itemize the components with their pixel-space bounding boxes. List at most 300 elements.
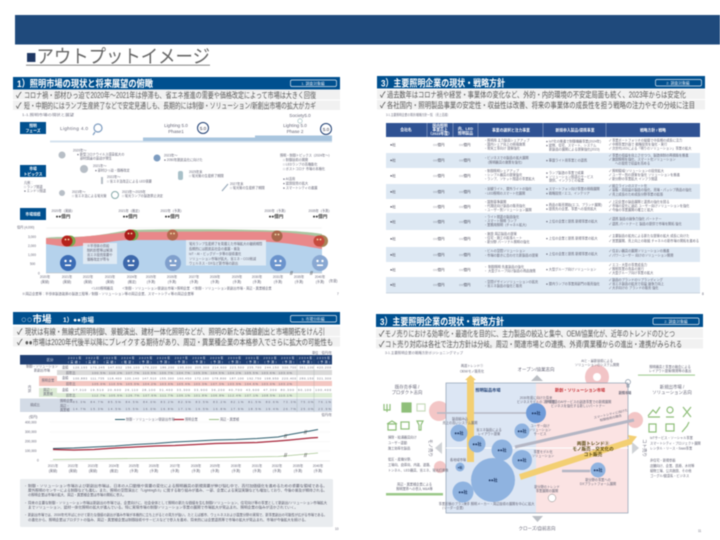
- map annotations: ソリューション: [529, 428, 551, 432]
- market topics: ● エンドリ関連: [24, 188, 47, 193]
- line chart: //: [284, 453, 288, 459]
- left column: product-oriented: 周辺・異業種企業による: [397, 482, 432, 486]
- note box: [20, 479, 333, 527]
- panel: market table and line chart: 単位：億円/年: [312, 350, 333, 355]
- table rows: ● 上位の企業と提携 新規事業の拡大: [546, 218, 598, 224]
- left column: product-oriented: ユーザー連動: [388, 440, 407, 445]
- market table labels: [26, 364, 76, 412]
- line chart axis labels: (予測): [232, 468, 240, 473]
- line chart axis labels: (予測): [253, 468, 261, 473]
- map annotations: （リーダー企業）: [440, 505, 466, 510]
- table rows: ・ビルの空間ソリューション: [484, 248, 525, 253]
- table rows: ・空間デザインソリューションの拡充: [484, 279, 539, 284]
- note box: 将来の主要な制御・ソリューション市場は新創出の市場では、企業向けに、社会全体として照明の新たな価値を生む制御/ソリューション、住宅向け等の事業として新創出/ソリューション市場拡大: [28, 500, 328, 505]
- market table header: 2021年 2022年 2023年 2024年 2025年 2026年 2027年 2028年 2029年 2030年 2031年 2032年 2033年 2034年 2035年: [68, 355, 330, 360]
- line chart legend: 照明企業: [185, 416, 199, 422]
- chart axis labels: 2027年: [189, 274, 200, 279]
- market topics: □ 省エネ法改正による LED需要: [107, 178, 153, 184]
- chart axis labels: (予測): [233, 279, 241, 284]
- market table labels: 異業種: [60, 407, 70, 412]
- map quadrants: 照明製品市場: [475, 386, 501, 394]
- table rows: ✓ 上記企業の製品展開と連携の強化を図る: [609, 199, 669, 204]
- map annotations: 再週トレンド①: [461, 363, 484, 368]
- map annotations: モノ販売→交叉化の: [572, 446, 614, 452]
- callout notes on chart: 長期的には脱炭素社会の進展・普及: [189, 246, 241, 251]
- chart axis labels: 2022年: [83, 274, 94, 279]
- chart axis labels: 2040年: [315, 274, 326, 279]
- market table labels: 照明企業: [60, 398, 74, 403]
- market topics: □ 蛍光管の生産終了期限: [189, 173, 224, 178]
- table rows: ● 大型グループ向けソリューション: [546, 266, 596, 272]
- market topics: □ 制御技術の開発: [283, 157, 309, 162]
- callout notes on chart: 蛍光ランプ生産終了を見据えた市場拡大の継続期間: [189, 241, 262, 246]
- chart axis labels: (実績): [63, 279, 71, 284]
- phase timeline: Lighting 5.0: [283, 123, 307, 128]
- company bubbles: ●●社: [531, 410, 541, 416]
- map annotations: レイアウト提案/開発等の進出: [649, 368, 691, 373]
- table rows: ・ 制御照明 先進製品の強化: [484, 264, 525, 269]
- table rows: ● 提携先の企業、事業への投資拡大: [546, 206, 597, 211]
- panel 1 key messages: ✓: [16, 102, 22, 110]
- right column: solution-oriented: 店舗向け、企業、医療、木材等: [650, 463, 695, 468]
- market size callouts: 2021年（推定）: [118, 208, 142, 213]
- chart axis labels: (予測): [253, 279, 261, 284]
- table header: 内、LED: [458, 126, 473, 131]
- market topics: □ 蛍光ランプの製造禁止決定: [122, 193, 164, 198]
- right column: solution-oriented: スマートシティ・プロジェクト展開: [650, 440, 701, 446]
- market topics: [20, 148, 332, 198]
- chart axis labels: 2035年: [294, 274, 305, 279]
- map annotations: 売上の高いシステム展開: [443, 420, 477, 425]
- table header: 戦略方針 / 戦略: [640, 128, 666, 132]
- line chart axis labels: 2021年: [48, 463, 59, 468]
- table rows: ✓ 住まい器具の展開ソリューションの推進: [609, 248, 670, 253]
- table rows: ・電気工事向け 提案強化: [484, 146, 521, 150]
- table rows: ・国内シェア向上の積極施策: [484, 142, 526, 146]
- table rows: ●社: [390, 252, 396, 257]
- panel 2 key messages: [377, 90, 705, 110]
- table rows: ●社: [390, 219, 396, 224]
- market table labels: 前年比: [66, 370, 76, 375]
- table rows: ○○億円: [459, 158, 471, 162]
- market size area chart: 3,000: [28, 235, 36, 239]
- line chart: [25, 414, 330, 473]
- table rows: ● 上位の企業と提携 新規事業の拡大: [546, 236, 598, 240]
- line chart axis labels: (予測): [211, 468, 219, 473]
- left column: product-oriented: [384, 384, 449, 496]
- table rows: ✓ エコ・大型の事業成長力: [609, 262, 647, 267]
- panel: major company status table: [377, 76, 705, 296]
- market size callouts: 2022年（予測）: [160, 208, 184, 213]
- table rows: ● 屋内ランプの事業用部門の販売強化: [546, 281, 601, 286]
- table rows: ○○億円: [459, 282, 471, 287]
- phase timeline: Phase1: [168, 129, 184, 134]
- market table labels: 照明企業: [42, 378, 55, 382]
- map quadrants: [429, 365, 643, 513]
- line chart axis labels: 2024年: [109, 463, 120, 468]
- market size callouts: 2020年（実績）: [51, 208, 75, 213]
- table rows: ●社: [390, 189, 396, 194]
- market topics: □ LEDランプの高機能化: [283, 162, 318, 166]
- chart axis labels: (年度): [329, 278, 338, 283]
- chart axis labels: (実績): [41, 279, 49, 284]
- line chart: 300,000: [25, 430, 37, 434]
- line chart axis labels: 2026年: [149, 463, 160, 468]
- chart axis labels: 2020年: [40, 274, 51, 279]
- table rows: ●社: [390, 173, 396, 178]
- table rows: ○○億円: [433, 267, 445, 272]
- line chart axis labels: (予測): [294, 468, 302, 473]
- table rows: ●社: [390, 236, 396, 241]
- table rows: ● スマートフォン向け事業の積極展開: [546, 186, 600, 191]
- panel 1 key messages: 短・中期的にはランプ生産終了などで安定見通しも、長期的には制御・ソリューション/新創出市場の拡大がカギ: [24, 100, 316, 110]
- market size callouts: ●●億円: [56, 213, 71, 220]
- right column: solution-oriented: 新規出市場 /: [660, 384, 685, 390]
- panel 4 heading: 2. 調査対象編: [664, 319, 688, 324]
- line chart: 0: [37, 458, 39, 462]
- table rows: ・住宅・施工の拡張ルート: [484, 235, 522, 240]
- table header: （2023年度）: [428, 131, 452, 136]
- market topics: □ ポストコロナ 市場の本格化: [283, 166, 326, 171]
- table rows: ○○億円: [459, 219, 471, 224]
- note box: 屋外照明のセンサーによる制御なども進む。また、照明の空間演出と「Lighting5.0」に関する取り組みが進み、一部、企業による実証実験なども増加しており、今後の普及が期待される。: [28, 488, 327, 492]
- market size callouts: ●●億円: [123, 213, 138, 220]
- table rows: ●社: [390, 267, 396, 272]
- company bubbles: ●●社: [497, 446, 507, 454]
- line chart axis labels: (予測): [150, 468, 158, 473]
- table rows: ✓ 量販・高収益の製品の強化、売場・パッシブ商品の強化: [609, 187, 693, 192]
- market topics: 2021年〜: [93, 163, 107, 168]
- market topics: 2027年末: [230, 181, 244, 186]
- market topics: 2020年〜: [73, 148, 87, 152]
- market table figures: [73, 366, 331, 411]
- callout notes on chart: IoT・AI・ビッグデータ等の技術進化: [189, 251, 242, 256]
- table rows: 提供、インフラとの協業: [549, 178, 585, 182]
- map quadrants: 新創・ソリューション市場: [555, 386, 606, 394]
- table header: 会社名: [400, 127, 412, 132]
- map annotations: 省エネ製品による: [476, 427, 502, 432]
- note box: の進化から、照明企業はプロダクトの強み、周辺・異業種企業は制御技術やサービスなどで参入を進め、将来的には企業連携等で市場の拡大が見込まれ、市場が今後拡大を続ける。: [28, 517, 308, 522]
- right column: solution-oriented: ゴーグル/健康系・ビジネス: [650, 473, 689, 478]
- market size callouts: ●●億円: [313, 213, 328, 220]
- right column: solution-oriented: [638, 374, 701, 478]
- map annotations: 制御技術の融合: [599, 412, 623, 422]
- map annotations: 製品組み込: [452, 416, 469, 421]
- left column: product-oriented: 照明業界への参入 M&A等: [396, 486, 434, 491]
- line chart: //: [284, 434, 288, 440]
- chart axis labels: (実績): [84, 279, 92, 284]
- market size area chart: 0: [38, 272, 40, 276]
- line chart legend: [29, 414, 240, 422]
- table rows: ・ビジネスでの製品の拡大展開: [484, 155, 529, 160]
- phase timeline: Phase 2: [287, 129, 304, 134]
- left column: product-oriented: 施工効率化製品: [388, 446, 410, 450]
- blue sentiment markers: [60, 255, 328, 271]
- axis labels and triangles: [427, 366, 648, 532]
- market size area chart: 市場規模: [25, 212, 41, 216]
- callout notes on chart: [83, 240, 266, 266]
- table header: 事業の選択と注力事業: [492, 128, 530, 132]
- phase timeline: [20, 113, 332, 142]
- panel 3 heading: ○○市場: [21, 314, 52, 326]
- panel 3 key messages: ✓: [17, 338, 23, 347]
- phase timeline: Lighting 4.0: [60, 126, 88, 132]
- company bubbles: ●●社: [458, 488, 468, 496]
- table rows: ●社: [390, 158, 396, 162]
- chart axis labels: 2024年: [127, 274, 138, 279]
- phase timeline: Society5.0: [289, 113, 311, 118]
- market table figures: 17,310 19,510 20,600 26,110 28,100 31,400 33,300 33,900 36,200 40,700 43,600 47,300 80,300 90,100 100,400: [73, 388, 331, 392]
- map annotations: 新規市場: [619, 390, 632, 395]
- callout notes on chart: ※半導体の供給: [87, 243, 110, 248]
- panel 3 key messages: ●●市場は2020年代後半以降にブレイクする期待があり、周辺・異業種企業の本格参入でさらに拡大の可能性も: [25, 337, 333, 347]
- red and green sentiment markers: [62, 230, 328, 247]
- table rows: ○○億円: [433, 282, 445, 287]
- table rows: ✓ 主要製品の拡充による新たな提案の拡大 成長に向けた: [609, 233, 689, 238]
- line chart axis labels: (実績): [69, 468, 77, 473]
- table rows: ・景観ライト、屋外ライトの強化: [484, 186, 533, 191]
- table rows: ○○億円: [433, 158, 445, 162]
- table rows: ✓ 事業の収益を向上させつつ、製造体制の再構築を推進: [609, 152, 689, 158]
- table rows: ・省エネ製品の強化と販売: [484, 283, 522, 288]
- panel 1 key messages: ✓: [16, 91, 22, 100]
- market topics: 凡例：: [24, 180, 34, 185]
- market size callouts: 2035年（予測）: [308, 208, 332, 213]
- market topics: トピックス: [24, 172, 43, 176]
- line chart axis labels: 2030年: [231, 463, 242, 468]
- map annotations: レイアウト提案: [478, 431, 501, 436]
- map annotations: [439, 358, 691, 510]
- left column: product-oriented: 低圧・産機分野、: [388, 456, 414, 462]
- table rows: ○○億円: [433, 173, 445, 178]
- table rows: ・市場の動きに合わせた新製品の提案: [484, 252, 539, 258]
- phase timeline: Lighting 5.0: [164, 123, 188, 128]
- note box: ・: [24, 513, 27, 517]
- table rows: ・ランプ、ソケット関連の事業拡大: [484, 176, 536, 181]
- market table header: [20, 355, 332, 364]
- map annotations: ビジネスモデルのコア事業: [517, 399, 556, 404]
- map annotations: AIと・最新技術による: [581, 358, 613, 363]
- icon: topic markers: [58, 152, 228, 198]
- panel 4 key messages: [376, 328, 703, 349]
- market size callouts: ●●億円: [269, 213, 284, 220]
- line chart axis labels: (実績): [49, 468, 57, 473]
- market table labels: 構成比: [30, 402, 41, 407]
- callout notes on chart: 価格改定が寄与: [87, 256, 110, 262]
- table rows: ●社: [390, 204, 396, 209]
- table rows: ✓ 事業ポートフォリオの組替で中長期の成長に注力: [609, 138, 682, 142]
- table rows: ○○億円: [459, 252, 471, 257]
- market size area chart: 1,000: [28, 253, 36, 257]
- table rows: ・シンプル器具の提案強化: [484, 172, 523, 177]
- panel 3 heading: 1）●●市場: [63, 315, 94, 324]
- table header: 新規参入製品/提携事業: [555, 128, 595, 132]
- trend arrows: [437, 375, 637, 477]
- market topics: 部材調達の逼迫が発生: [80, 156, 113, 160]
- map annotations: ユーザー向け: [530, 423, 550, 428]
- table rows: 新製品の展開による提案強化(2023): [549, 146, 600, 152]
- market table header: (実績) (実績) (実績) (推定) (予測) (予測) (予測) (予測) (予測) (予測) (予測) (予測) (予測) (予測) (予測): [68, 359, 330, 364]
- phase timeline: フェーズ: [26, 128, 41, 133]
- callout notes on chart: ウェルネス・DXなど新市場の創出: [189, 260, 238, 266]
- chart axis labels: (推定): [128, 279, 136, 284]
- market table figures: 112.7% 105.6% 126.7% 107.6% 111.7% 106.1% 101.8% 106.8% 112.4% 107.1% 108.5% 110.1%: [92, 394, 292, 398]
- table rows: ・業務用照明（チャネル拡大）: [484, 222, 529, 227]
- line chart axis labels: 2032年: [272, 463, 283, 468]
- market topics: □ 省エネ法による蛍光管: [72, 193, 107, 198]
- panel 1 key messages: [13, 90, 340, 110]
- panel: major company status table: 3-1.主要照明企業の現状/戦略方針一覧 （売上高順）: [386, 112, 450, 117]
- market topics: ● 新型コロナウイルス感染拡大の: [77, 152, 124, 156]
- market table header: 区分: [47, 357, 54, 362]
- chart legend and source: ※周辺企業等：半導体製造装置の製造工程等／制御・ソリューション等の周辺企業、スマートシティ等の周辺企業等: [22, 291, 195, 296]
- market size area chart: 500: [30, 262, 36, 266]
- axis labels and triangles: モノ売り: [427, 439, 434, 457]
- table rows: ● 商品の販売開始(エコ、ブランド展開): [546, 202, 602, 207]
- market table labels: 金額: [62, 364, 69, 370]
- note box: ・: [24, 484, 27, 488]
- callout notes on chart: 制約影響等は解消: [87, 248, 112, 252]
- panel 2 heading: [377, 76, 705, 90]
- table rows: ✓ 営業展開、売上向上の取組 チャネルの新市場の開拓を進める: [609, 238, 699, 243]
- table rows: ○○億円: [459, 142, 471, 147]
- map annotations: OEM/モノ販売化: [460, 368, 485, 374]
- chart axis labels: (実績): [106, 279, 114, 284]
- panel 4 heading: [376, 314, 703, 328]
- table rows: ✓ 照明事業の改善の実行: [609, 266, 645, 271]
- panel 3 key messages: ✓: [17, 328, 23, 336]
- panel 2 heading: 2. 調査対象編: [666, 80, 690, 86]
- table rows: ・ユーザー別ソリューション展開: [484, 207, 532, 212]
- market topics: 2023年〜2025年: [122, 189, 147, 194]
- company bubbles: ●●社: [517, 456, 527, 464]
- chart axis labels: //: [310, 271, 313, 277]
- panel 3 key messages: [13, 326, 340, 347]
- axis labels and triangles: コト売り: [641, 439, 648, 457]
- market table figures: 14.7% 15.3% 14.5% 15.5% 16.0% 16.8% 17.1% 16.5% 16.8% 17.9% 18.5% 19.4% 26.7% 25.0% 23.9%: [73, 407, 331, 411]
- right column: solution-oriented: IoTサービス・ソーシャル事業: [650, 435, 694, 440]
- table rows: ● ソリューション関連のサービス: [546, 174, 593, 179]
- right column: solution-oriented: ソリューション志向: [652, 389, 692, 396]
- company bubbles: ●社: [458, 464, 462, 470]
- map annotations: コト販売: [584, 451, 603, 458]
- map annotations: 各地域市場: [450, 457, 467, 462]
- panel 2 key messages: ✓: [380, 90, 386, 100]
- map annotations: 照明関連のAIサービスの創造事業での新規展開: [545, 399, 611, 404]
- chart axis labels: 2026年: [167, 274, 178, 279]
- map annotations: サービス: [534, 431, 546, 436]
- chart legend and source: ＜制御・ソリューション/新創出市場＞照明企業: [122, 286, 191, 290]
- market topics: ● 2050年脱炭素化に向けた: [164, 157, 203, 162]
- table rows: ○○億円: [459, 267, 471, 272]
- table rows: ・制御照明シェアアップ: [484, 168, 520, 173]
- market table labels: 内: [28, 384, 31, 389]
- map annotations: 新分野の事業への: [585, 477, 611, 482]
- table rows: ○○億円: [459, 204, 471, 209]
- table header: [386, 123, 700, 137]
- line chart: 200,000: [25, 440, 37, 444]
- market table figures: 105.0% 110.5% 105.9% 104.2% 103.6% 105.4% 103.3% 107.3% 103.9% 104.6% 103.0% 103.2%: [92, 382, 292, 386]
- chart legend and source: ＜LED照明器具: [91, 286, 114, 290]
- market table figures: 100,883 111,735 118,400 120,140 147,510 155,300 160,450 172,100 178,800 187,100 192,750 198,950 220,400 280,150 321,300: [73, 376, 331, 380]
- chart axis labels: (予測): [168, 279, 176, 284]
- map annotations: 大手 照明メーカー・周辺技術の展開を中心に拡大: [463, 501, 535, 506]
- line chart axis labels: (予測): [273, 468, 281, 473]
- map annotations: 新分野のトレンド: [534, 484, 560, 489]
- phase timeline: 照明: [29, 123, 37, 128]
- map annotations: DXプラットフォーム展開: [580, 481, 616, 486]
- chart axis labels: 2029年: [232, 274, 243, 279]
- panel 1 heading: 1）照明市場の現状と将来展望の俯瞰: [17, 78, 153, 90]
- market table labels: 前年比: [66, 392, 76, 398]
- line chart axis labels: 2023年: [88, 463, 99, 468]
- map annotations: 事業形態のブランド: [439, 501, 467, 506]
- phase timeline: 5.0: [200, 126, 207, 131]
- note box: 制御・ソリューション市場および新創出市場は、日本の人口動態や需要の変化による照明器具の新規需要が伸び悩む中で、高付加価値化を進めるための重要な領域である。: [28, 483, 327, 488]
- panel 3 key messages: 現状は有線・無線式照明制御、景観演出、建材一体化照明などが、照明の新たな価値創出と市場開拓をけん引: [25, 326, 325, 336]
- note box: 新創出市場では、2030年代半ばにかけて新たな価値の創出が進み市場が本格的に立ち上がるとの見方が強い。たとえば都市、ウェルネスおよび農業分野の実現で、新事業創出の可能性が広がる市場である。: [28, 512, 327, 517]
- market size area chart: 億円 (4,000): [17, 224, 34, 230]
- table header: 事業売上: [432, 127, 448, 132]
- panel 3 heading: [13, 312, 340, 326]
- left column: product-oriented: 工場向、倉庫向、内装、道路、: [388, 462, 433, 467]
- table rows: ○○億円: [459, 236, 471, 241]
- company table: [386, 123, 700, 293]
- market table bands: [20, 355, 332, 412]
- table rows: ・LED照明のスマート化展開: [484, 190, 525, 196]
- line chart axis labels: 2028年: [191, 463, 202, 468]
- table rows: ✓ パワーユーザー 向けのソリューション開発: [609, 252, 674, 258]
- chart axis labels: 2031年: [273, 274, 284, 279]
- left column: product-oriented: プロダクト志向: [392, 389, 422, 396]
- panel: major company status table: 8: [702, 292, 704, 296]
- table rows: ✓ 施設照明を強化、スマート化ソリューション: [609, 156, 676, 162]
- header band: [15, 15, 720, 44]
- positioning map chart: [384, 358, 701, 532]
- panel 4 key messages: ✓: [379, 330, 385, 338]
- map annotations: ビジネスを強化する新しいパートナー: [551, 403, 605, 408]
- table rows: ✓ 新分野の事業拡大 インフラ関連: [609, 176, 658, 181]
- left column: product-oriented: 既存売手場 /: [395, 384, 420, 390]
- panel 3 heading: 3. 市場分析編: [301, 316, 325, 322]
- market topics: 2023年〜: [72, 189, 86, 194]
- market topics: □ 蛍光管の生産終了期限: [230, 185, 265, 190]
- note box: の照明企業は市場の拡大、周辺・異業種企業は市場の開拓に参入。: [28, 492, 126, 497]
- panel: positioning map: [376, 314, 703, 533]
- table rows: ✓ 中期事業計画で 戦略投資を強化・実行: [609, 142, 668, 146]
- chart axis labels: (予測): [274, 279, 282, 284]
- table rows: への投資で収益を高める: [615, 160, 650, 166]
- chart axis labels: 2030年: [252, 274, 263, 279]
- table rows: ・代理店向け製品の販売強化: [484, 203, 526, 208]
- table rows: ○○億円: [433, 236, 445, 241]
- table rows: ✓ 市場の変化に適応 ユーザー向けソリューションを強化: [609, 203, 690, 208]
- market table figures: 100.5% 110.2% 107.7% 110.5% 106.7% 104.7% 105.3% 104.5% 104.2% 105.5% 103.6% 103.0%: [92, 371, 292, 375]
- market size callouts: [51, 208, 332, 220]
- market table figures: 120,193 170,245 147,032 156,100 176,220 186,200 195,000 205,300 214,600 223,500 235,700 244,150 300,700 361,100 420,200: [73, 366, 331, 370]
- panel 4 heading: 3）主要照明企業の現状・戦略方針: [380, 316, 504, 328]
- map annotations: スマートシティに向けた: [593, 407, 628, 420]
- line chart axis labels: 2031年: [252, 463, 263, 468]
- table rows: ✓ 大型グループ向け事業の拡大: [609, 270, 654, 275]
- line chart legend: (億円): [29, 414, 38, 419]
- line chart axis labels: 2040年: [313, 463, 324, 468]
- table rows: ○○億円: [459, 189, 471, 194]
- company bubbles: ●●社: [488, 476, 498, 484]
- market table labels: 金額: [62, 375, 69, 380]
- table rows: ● 建物、住宅、スマート、システム: [546, 142, 596, 148]
- market data table: [20, 355, 332, 412]
